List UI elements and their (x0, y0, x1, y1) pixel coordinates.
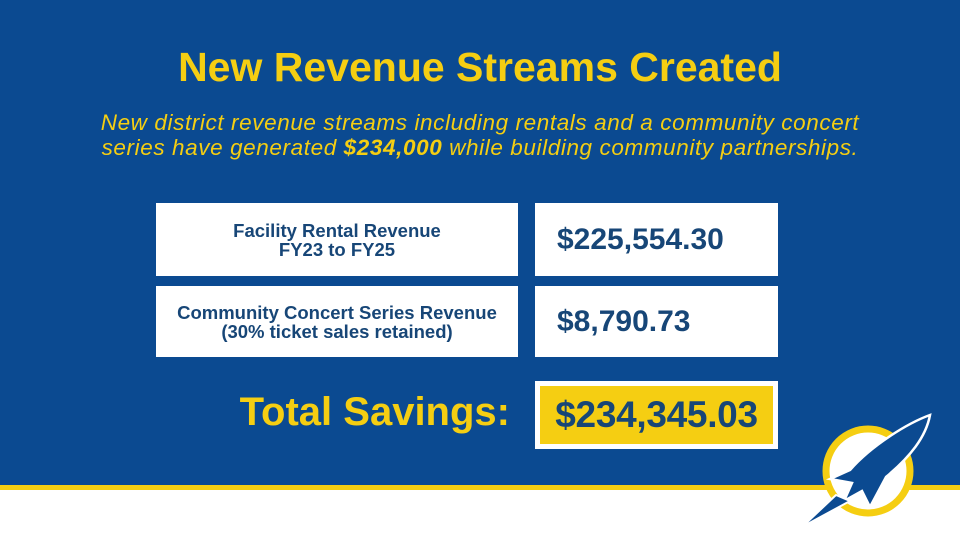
label: concert series: (30% ticket sales retained) (221, 320, 453, 342)
label: facility rental (156, 203, 518, 276)
value: facility rental (535, 203, 778, 276)
title: New Revenue Streams Created (178, 44, 782, 90)
value: concert series: $8,790.73 (557, 304, 690, 338)
total value: $234,345.03 (555, 394, 758, 435)
label: facility rental: Facility Rental Revenue (233, 220, 441, 240)
subtitle (101, 110, 860, 160)
label: concert series (156, 286, 518, 357)
icon: rocket logo (808, 413, 932, 522)
subtitle: New district revenue streams including rentals and a community concert (101, 110, 859, 135)
total value (535, 381, 778, 449)
label: facility rental: FY23 to FY25 (279, 238, 395, 260)
total label: Total Savings: (240, 390, 510, 434)
value: concert series (535, 286, 778, 357)
value: facility rental: $225,554.30 (557, 222, 724, 256)
subtitle: series have generated $234,000 while building community partnerships. (102, 135, 858, 160)
label: concert series: Community Concert Series Revenue (177, 302, 497, 322)
